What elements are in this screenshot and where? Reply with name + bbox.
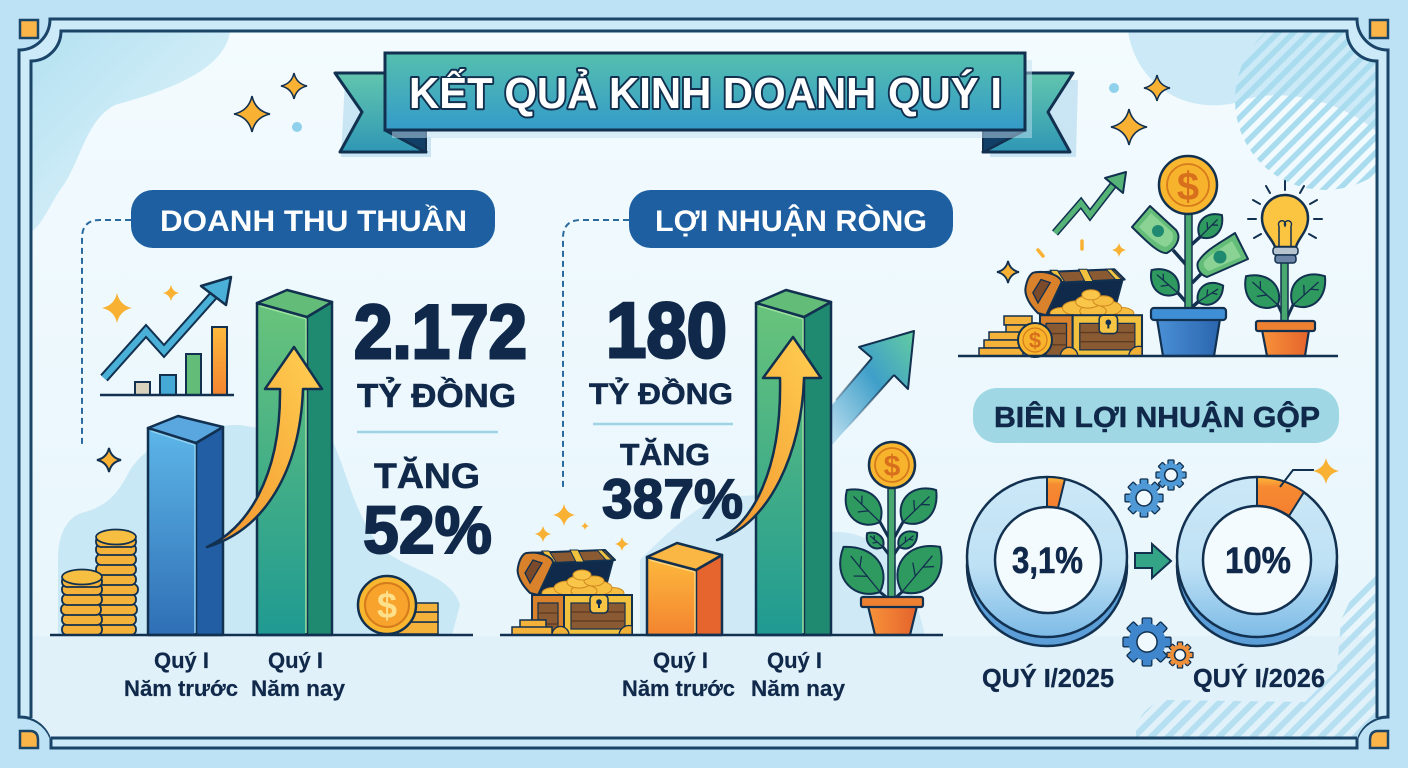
growth: tăng 52%	[363, 457, 492, 568]
icon: green rising arrow	[1055, 172, 1126, 233]
heading pill: lợi nhuận ròng: LỢI NHUẬN RÒNG	[655, 204, 927, 238]
axis labels 1: Quý I	[268, 648, 323, 673]
icon: dollar coin: $	[377, 585, 397, 626]
panel: doanh thu thuần	[50, 190, 527, 701]
axis labels 2: Năm nay	[751, 676, 846, 701]
divider	[357, 431, 498, 433]
axis labels 2: Quý I	[653, 648, 708, 673]
growth: tăng 52%: TĂNG	[374, 457, 480, 496]
icon: coin plant	[828, 442, 954, 635]
donut chart: 10%	[1177, 477, 1337, 646]
arrow between donuts	[1135, 544, 1171, 578]
axis labels 1	[124, 648, 346, 701]
donut label 2026: QUÝ I/2026	[1193, 663, 1325, 693]
panel: growth illustration	[958, 156, 1338, 357]
axis labels 2	[622, 648, 846, 701]
donut chart: 10%: 10%	[1225, 540, 1291, 581]
value: 180 tỷ đồng	[589, 286, 733, 411]
icon: money plant	[1132, 156, 1248, 356]
donut label 2025: QUÝ I/2025	[982, 663, 1114, 693]
donut chart: 3,1%: 3,1%	[1012, 540, 1083, 581]
title text: KẾT QUẢ KINH DOANH QUÝ I	[409, 68, 1002, 118]
bar: quý I năm nay, green	[756, 290, 831, 635]
icon: coin stacks	[61, 530, 138, 635]
icon: mini rising chart	[100, 277, 234, 395]
icon: gears top	[1125, 460, 1186, 517]
axis 1	[50, 634, 473, 636]
heading pill: doanh thu thuần	[131, 190, 495, 248]
connector dashed line 1	[82, 220, 131, 445]
value: 2.172 tỷ đồng	[354, 290, 527, 414]
value: 180 tỷ đồng: 180	[606, 286, 727, 374]
growth arrow	[207, 347, 322, 547]
growth: tăng 387%: TĂNG	[620, 437, 710, 472]
axis 3	[958, 355, 1338, 357]
big diagonal arrow	[832, 331, 914, 445]
arrow outline	[836, 331, 914, 438]
bar: quý I năm trước	[148, 416, 223, 635]
icon: treasure chest with coins	[979, 269, 1142, 357]
value: 2.172 tỷ đồng: 2.172	[354, 290, 527, 375]
axis labels 1: Năm nay	[251, 676, 346, 701]
icon: coin plant: $	[884, 450, 901, 483]
icon: sparkles	[535, 504, 629, 551]
icon: treasure chest	[512, 550, 632, 635]
icon: banknote right	[1197, 233, 1248, 277]
axis labels 2: Quý I	[767, 648, 822, 673]
growth: tăng 387%: 387%	[602, 467, 743, 530]
heading pill: lợi nhuận ròng	[629, 190, 953, 248]
bar: quý I năm nay	[257, 290, 332, 635]
icon: gears bottom	[1123, 618, 1193, 668]
divider	[593, 423, 733, 425]
axis 2	[500, 634, 943, 636]
heading pill: biên lợi nhuận gộp	[973, 388, 1339, 443]
icon: money plant: $	[1177, 165, 1199, 209]
icon: sparkle	[97, 448, 121, 472]
donut chart: 3,1%	[967, 477, 1127, 646]
decorative sparkles near title	[234, 73, 1170, 145]
panel: biên lợi nhuận gộp	[967, 388, 1339, 693]
callout sparkle	[1280, 458, 1339, 487]
heading pill: biên lợi nhuận gộp: BIÊN LỢI NHUẬN GỘP	[994, 400, 1320, 434]
icon: light bulb plant	[1236, 181, 1334, 356]
icon: small sparkles and sparks	[997, 241, 1126, 283]
axis labels 1: Quý I	[154, 648, 209, 673]
value: 2.172 tỷ đồng: TỶ ĐỒNG	[357, 377, 516, 414]
title banner	[335, 53, 1078, 157]
axis labels 1: Năm trước	[124, 676, 238, 701]
growth: tăng 387%	[602, 437, 743, 530]
connector dashed line 2	[563, 220, 629, 487]
value: 180 tỷ đồng: TỶ ĐỒNG	[589, 377, 733, 411]
bar: quý I năm trước, orange	[647, 543, 722, 635]
panel: lợi nhuận ròng	[500, 190, 954, 701]
axis labels 2: Năm trước	[622, 676, 735, 701]
icon: banknote left	[1132, 206, 1178, 253]
growth arrow	[717, 337, 821, 540]
icon: dollar coin	[358, 576, 438, 634]
growth: tăng 52%: 52%	[363, 493, 492, 568]
heading pill: doanh thu thuần: DOANH THU THUẦN	[160, 204, 467, 238]
icon: treasure chest with coins: $	[1029, 328, 1041, 353]
